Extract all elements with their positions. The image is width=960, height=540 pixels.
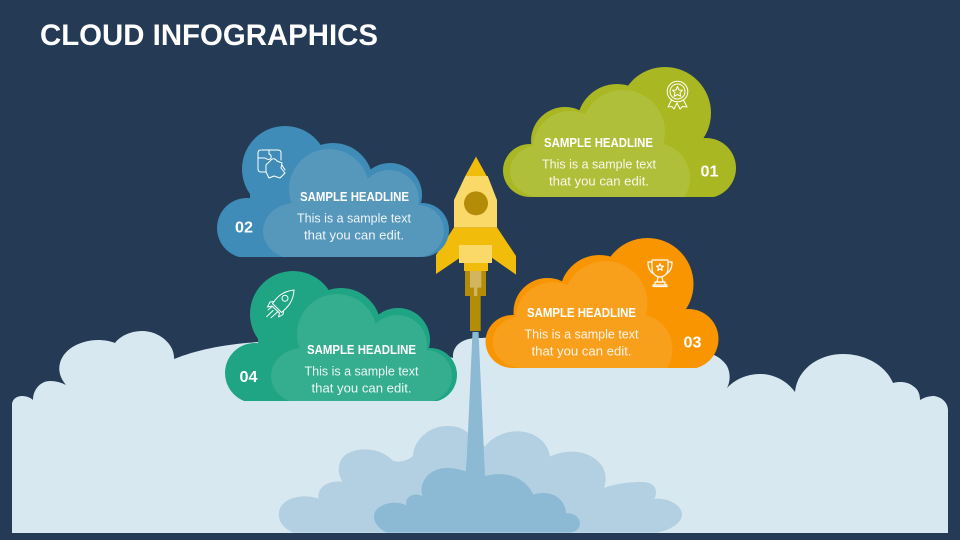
panel: cloud 03 [486, 238, 718, 368]
icon: trophy [648, 260, 672, 286]
number: 01 [700, 164, 719, 180]
rocket nozzle highlight [470, 271, 481, 296]
ground cloud bank [12, 312, 948, 533]
rocket body [454, 176, 497, 227]
panel: cloud 04 [225, 271, 457, 404]
rocket window [464, 191, 488, 215]
panel: cloud 02 [217, 126, 449, 259]
panel: cloud 03: that you can edit. [532, 344, 632, 358]
body text: This is a sample text [542, 158, 657, 172]
rocket fins [436, 227, 516, 275]
body text: This is a sample text [524, 328, 639, 342]
body text: This is a sample text [297, 212, 412, 226]
icon: award rosette [667, 81, 688, 109]
number: 04 [240, 369, 258, 386]
number: 03 [684, 334, 702, 352]
cloud shape [503, 67, 736, 197]
exhaust cloud, inner with jet [374, 332, 580, 533]
panel: cloud 02: that you can edit. [304, 228, 404, 242]
rocket [436, 157, 516, 331]
rocket stem [470, 293, 481, 331]
cloud shape [225, 271, 457, 404]
headline: SAMPLE HEADLINE [307, 343, 416, 357]
rocket base panel [459, 245, 492, 263]
headline: SAMPLE HEADLINE [544, 136, 653, 150]
icon: rocket [267, 290, 294, 318]
number: 02 [235, 220, 253, 236]
rocket nose [465, 157, 487, 176]
icon: puzzle [258, 150, 285, 178]
exhaust cloud, outer [279, 426, 682, 533]
cloud shape [217, 126, 449, 259]
panel: cloud 04: that you can edit. [312, 382, 412, 396]
body text: This is a sample text [304, 364, 419, 378]
cloud shape [486, 238, 718, 368]
headline: SAMPLE HEADLINE [300, 190, 409, 204]
headline: SAMPLE HEADLINE [527, 306, 636, 320]
rocket nozzle [465, 271, 486, 296]
panel: cloud 01: that you can edit. [549, 174, 649, 188]
panel: cloud 01 [503, 67, 736, 197]
title: CLOUD INFOGRAPHICS [40, 19, 378, 52]
